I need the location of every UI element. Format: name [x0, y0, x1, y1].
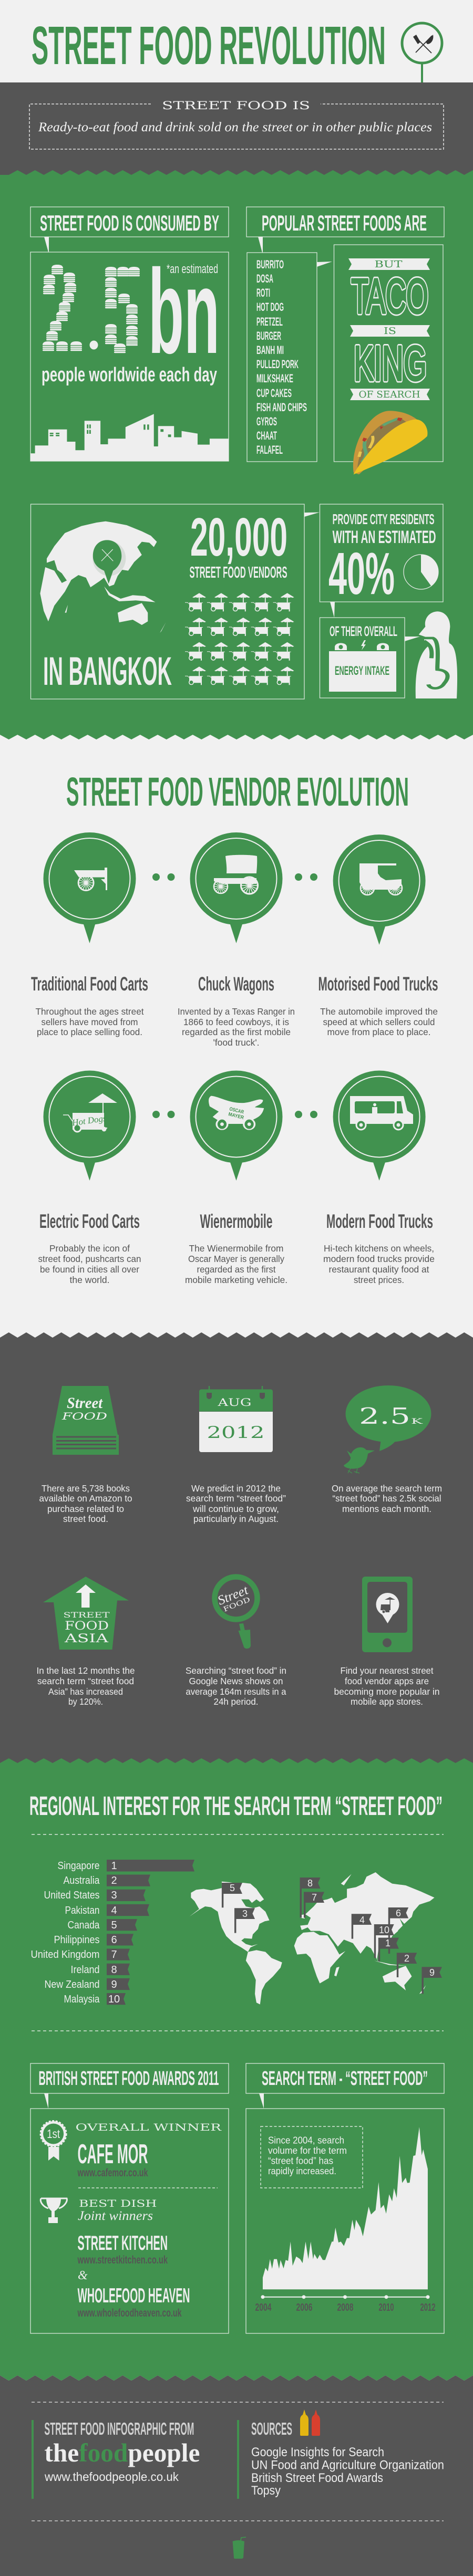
icon: book: FOOD — [61, 1411, 107, 1422]
icon: battery: ENERGY INTAKE — [335, 664, 389, 678]
vendor description: be found in cities all over — [40, 1264, 139, 1275]
vendor description: Invented by a Texas Ranger in — [178, 1006, 295, 1017]
timeline axis: 2008 — [337, 2302, 353, 2313]
credit block: thefoodpeople — [44, 2438, 200, 2467]
sources list: Topsy — [251, 2484, 281, 2498]
taco is king box: KING — [354, 336, 427, 391]
trend note: volume for the term — [268, 2145, 347, 2156]
sources list: British Street Food Awards — [251, 2471, 383, 2485]
burger numeral 2.5 — [43, 265, 140, 353]
stat text: Searching “street food” in — [186, 1665, 286, 1676]
icon: globe with pin — [40, 522, 166, 633]
vendor description: street food, pushcarts can — [38, 1254, 141, 1264]
bar chart: regional ranking: Philippines — [54, 1934, 100, 1946]
vendor: traditional food carts — [31, 832, 148, 1037]
pin: wienermobile: OSCAR — [229, 1106, 244, 1115]
definition dashed frame — [29, 104, 444, 149]
vendor description — [36, 1006, 144, 1037]
vendor description: place to place selling food. — [37, 1027, 142, 1037]
vendor description: sellers have moved from — [41, 1017, 138, 1027]
bar chart: regional ranking: Australia — [63, 1875, 100, 1886]
panel: popular foods — [246, 207, 444, 474]
consumed heading box — [30, 207, 229, 252]
vendor description — [178, 1006, 295, 1048]
icon: magnifier — [214, 1577, 258, 1649]
food list: FISH AND CHIPS — [256, 401, 307, 414]
bar chart: regional ranking — [30, 1834, 444, 2031]
connector dots — [152, 1111, 174, 1118]
stat text: search term “street food — [37, 1676, 134, 1686]
vendor description: 1866 to feed cowboys, it is — [183, 1017, 289, 1027]
panel: definition band — [0, 82, 473, 175]
trend note: rapidly increased. — [268, 2166, 336, 2176]
ampersand: & — [78, 2269, 88, 2282]
vendor description: The Wienermobile from — [189, 1243, 284, 1254]
sources list: Google Insights for Search — [251, 2445, 384, 2459]
food list: PULLED PORK — [256, 358, 299, 371]
credit block: www.thefoodpeople.co.uk — [44, 2470, 179, 2484]
bar chart: regional ranking: New Zealand — [44, 1979, 100, 1990]
overall winner label: OVERALL WINNER — [76, 2122, 222, 2133]
trend heading box — [246, 2063, 444, 2109]
connector dots — [295, 1111, 317, 1118]
bar chart: regional ranking: 4 — [111, 1905, 117, 1916]
taco is king box: BUT — [374, 259, 403, 270]
vendor description: the world. — [69, 1275, 109, 1285]
icon: sauce bottles — [300, 2410, 320, 2436]
stat text: “street food” has 2.5k social — [332, 1493, 441, 1504]
stat caption: people worldwide each day — [42, 364, 217, 386]
taco is king box: KING — [354, 336, 427, 391]
panel: energy intake: OF THEIR OVERALL — [330, 623, 397, 639]
icon: arrow house: ASIA — [64, 1632, 109, 1645]
pin: hot dog cart — [43, 1070, 136, 1181]
joint winner two url: www.wholefoodheaven.co.uk — [77, 2307, 182, 2319]
stat text: On average the search term — [332, 1483, 442, 1494]
icon: rosette: 1st — [47, 2127, 60, 2141]
pin: traditional cart — [43, 832, 136, 943]
bar chart: regional ranking: 6 — [111, 1934, 117, 1946]
flag numbers: 8 — [307, 1878, 313, 1889]
flag numbers — [230, 1878, 435, 1978]
icon: calendar: 2012 — [207, 1423, 265, 1442]
stat text: Asia” has increased — [48, 1686, 123, 1697]
bar chart: regional ranking: United States — [44, 1890, 100, 1901]
food list: PRETZEL — [256, 315, 283, 328]
bar chart: regional ranking: Singapore — [58, 1860, 100, 1872]
awards heading box — [30, 2063, 229, 2109]
food list: HOT DOG — [256, 300, 284, 314]
taco is king box — [334, 245, 443, 462]
bar chart: regional ranking: 5 — [111, 1920, 117, 1931]
food list: FALAFEL — [256, 443, 283, 456]
bar chart: regional ranking: Malaysia — [64, 1994, 100, 2005]
awards heading box: BRITISH STREET FOOD AWARDS 2011 — [39, 2068, 219, 2090]
timeline axis: 2012 — [420, 2302, 435, 2313]
map continents — [189, 1872, 435, 2005]
panel: consumed by: bn — [148, 245, 220, 379]
stat text: We predict in 2012 the — [191, 1483, 281, 1494]
panel: city residents — [320, 504, 443, 618]
credit block: STREET FOOD INFOGRAPHIC FROM — [44, 2419, 194, 2438]
bar chart: regional ranking: 9 — [111, 1979, 117, 1990]
icon: magnifier: Street — [215, 1583, 251, 1608]
timeline axis — [255, 2295, 435, 2313]
bar chart: regional ranking: Pakistan — [65, 1905, 100, 1916]
panel: green section two — [0, 1758, 473, 2381]
food list: GYROS — [256, 415, 277, 428]
flag numbers: 1 — [385, 1938, 390, 1948]
stat text: There are 5,738 books — [42, 1483, 130, 1494]
flag numbers: 5 — [230, 1883, 235, 1893]
icon: book — [53, 1386, 119, 1455]
icon: book: Street — [67, 1394, 104, 1412]
stat text: will continue to grow, — [192, 1504, 279, 1514]
vendor: modern food trucks — [295, 1070, 435, 1285]
icon: phone — [362, 1577, 413, 1652]
bar chart: regional ranking: Ireland — [70, 1964, 100, 1976]
panel: energy intake — [320, 611, 457, 698]
joint winner one: STREET KITCHEN — [78, 2232, 168, 2255]
panel: green section one — [0, 170, 473, 739]
city skyline — [30, 414, 229, 461]
callout tail to residents — [304, 513, 320, 517]
bar chart: regional ranking: 7 — [111, 1949, 117, 1960]
stat: google news — [186, 1577, 286, 1707]
stat text — [332, 1483, 442, 1514]
food list: BURGER — [256, 329, 281, 342]
vendor description: regarded as the first — [197, 1264, 276, 1275]
stat text: street food. — [63, 1514, 108, 1524]
callout tail to energy — [330, 602, 335, 618]
divider — [78, 2187, 218, 2188]
vendor description: Throughout the ages street — [36, 1006, 144, 1017]
connector dots — [152, 873, 174, 881]
vendor description — [320, 1006, 438, 1037]
food list: BURRITO — [256, 258, 284, 271]
definition text: Ready-to-eat food and drink sold on the street or in other public places — [38, 120, 432, 134]
stat text — [186, 1665, 286, 1707]
food list: BANH MI — [256, 343, 284, 357]
sources block — [237, 2410, 444, 2499]
bar chart: regional ranking: United Kingdom — [30, 1949, 100, 1960]
food list: DOSA — [256, 272, 273, 285]
credit block — [32, 2419, 200, 2499]
stat: social mentions — [332, 1385, 442, 1514]
bar chart: regional ranking: 3 — [111, 1890, 117, 1901]
pin: wienermobile — [190, 1070, 283, 1181]
icon: calendar: AUG — [217, 1396, 251, 1409]
vendor title: Traditional Food Carts — [31, 973, 148, 995]
pie chart — [404, 555, 438, 589]
stat text: 24h period. — [213, 1696, 259, 1707]
vendor description — [185, 1243, 287, 1285]
vendor description: move from place to place. — [327, 1027, 431, 1037]
icon: arrow house: STREET — [63, 1611, 110, 1620]
stat text: purchase related to — [47, 1504, 124, 1514]
vendor description: Probably the icon of — [49, 1243, 130, 1254]
icon: calendar — [199, 1386, 273, 1452]
icon: bird with speech bubble: K — [411, 1417, 423, 1426]
taco is king box: OF SEARCH — [358, 389, 420, 400]
flag numbers: 4 — [359, 1915, 365, 1925]
bar chart: regional ranking: 1 — [111, 1860, 117, 1872]
timeline axis: 2006 — [296, 2302, 312, 2313]
sources block: SOURCES — [251, 2419, 292, 2438]
panel: consumed by — [30, 207, 229, 461]
panel: search trend — [246, 2063, 444, 2333]
flag numbers: 9 — [429, 1967, 435, 1978]
icon: taco — [353, 411, 427, 474]
panel: footer — [0, 2375, 473, 2576]
consumed heading box: STREET FOOD IS CONSUMED BY — [40, 211, 219, 235]
vendor: motorised food trucks — [295, 835, 438, 1037]
bar chart: regional ranking: 2 — [111, 1875, 117, 1886]
sources list — [251, 2445, 444, 2498]
stat text: average 164m results in a — [186, 1686, 286, 1697]
flag numbers: 6 — [396, 1908, 401, 1918]
icon: fork and knife sign — [402, 23, 442, 83]
stat text — [334, 1665, 439, 1707]
vendor description: 'food truck'. — [213, 1037, 260, 1048]
panel: statistics band — [0, 1332, 473, 1765]
pin: hot dog cart: Hot Dogs — [71, 1113, 107, 1128]
stat text — [186, 1483, 286, 1524]
vendor: wienermobile — [152, 1070, 287, 1285]
stat: asia growth — [37, 1577, 135, 1707]
vendor title: Wienermobile — [200, 1211, 272, 1232]
vendor description: The automobile improved the — [320, 1006, 438, 1017]
stat text: becoming more popular in — [334, 1686, 439, 1697]
vendor: electric food carts — [38, 1070, 141, 1285]
sources list: UN Food and Agriculture Organization — [251, 2458, 444, 2473]
flag numbers: 7 — [312, 1892, 317, 1903]
callout tail to person — [405, 637, 420, 641]
pin: wagon — [190, 832, 283, 943]
vendor description: Oscar Mayer is generally — [188, 1254, 284, 1264]
vendor title: Chuck Wagons — [198, 973, 274, 995]
food list: MILKSHAKE — [256, 372, 293, 385]
food list — [247, 253, 317, 462]
icon: trophy — [40, 2198, 67, 2223]
consumed stat box — [30, 252, 229, 461]
icon: arrow house: FOOD — [65, 1620, 109, 1633]
vendor: chuck wagons — [152, 832, 295, 1048]
stat: mobile apps — [334, 1577, 439, 1707]
best dish label: BEST DISH — [79, 2198, 157, 2209]
panel: awards — [30, 2063, 229, 2333]
bar chart: regional ranking: 10 — [108, 1994, 120, 2005]
pin: wienermobile: MAYER — [228, 1111, 244, 1121]
stat text: search term “street food” — [186, 1493, 286, 1504]
flag numbers: 2 — [404, 1953, 409, 1964]
list callout tail — [317, 262, 332, 267]
connector dots — [295, 873, 317, 881]
stat text — [39, 1483, 132, 1524]
icon: person with digestive tract — [416, 611, 457, 698]
vendors count: 20,000 — [190, 507, 287, 567]
food list: ROTI — [256, 286, 270, 299]
vendor description: regarded as the first mobile — [182, 1027, 291, 1037]
icon: rosette — [41, 2121, 66, 2161]
vendor description: mobile marketing vehicle. — [185, 1275, 287, 1285]
vendor description: street prices. — [354, 1275, 404, 1285]
icon: magnifier: FOOD — [222, 1596, 252, 1614]
stat text: food vendor apps are — [345, 1676, 429, 1686]
joint winner one url: www.streetkitchen.co.uk — [77, 2254, 168, 2266]
vendor description — [38, 1243, 141, 1285]
world map with flags — [189, 1872, 442, 2005]
icon: battery — [329, 640, 396, 692]
map flags — [222, 1878, 442, 1994]
vendor description: speed at which sellers could — [323, 1017, 435, 1027]
panel: awards: CAFE MOR — [78, 2139, 148, 2170]
flag numbers: 3 — [242, 1908, 248, 1919]
stat text: available on Amazon to — [39, 1493, 132, 1504]
icon: drink cup — [233, 2537, 246, 2559]
stat text: mentions each month. — [342, 1504, 431, 1514]
timeline axis: 2004 — [255, 2302, 272, 2313]
timeline axis: 2010 — [378, 2302, 394, 2313]
stat: books — [39, 1386, 132, 1524]
taco is king box: IS — [384, 326, 396, 337]
stat text: mobile app stores. — [351, 1696, 423, 1707]
trend note — [261, 2126, 363, 2188]
definition heading: STREET FOOD IS — [162, 99, 310, 112]
icon grid: carts — [185, 593, 294, 685]
icon: arrow house — [43, 1577, 129, 1650]
pin: motor truck — [333, 835, 426, 945]
vendor description: modern food trucks provide — [323, 1254, 435, 1264]
trend note: “street food” has — [268, 2156, 333, 2166]
estimated note: *an estimated — [167, 262, 218, 276]
stat text: Google News shows on — [189, 1676, 283, 1686]
icon: bird with speech bubble: 2.5 — [359, 1403, 410, 1429]
pin: modern truck — [333, 1070, 426, 1181]
location label: IN BANGKOK — [43, 649, 172, 694]
stat text — [37, 1665, 135, 1707]
40 percent: 40% — [328, 540, 395, 607]
vendor description — [323, 1243, 435, 1285]
panel: bangkok vendors — [30, 504, 320, 699]
food list: CHAAT — [256, 429, 277, 442]
trend note: Since 2004, search — [268, 2135, 344, 2146]
food list: CUP CAKES — [256, 387, 292, 400]
flag numbers: 10 — [379, 1925, 389, 1935]
area chart — [263, 2127, 428, 2289]
bar chart: regional ranking: 8 — [111, 1964, 117, 1976]
vendor description: restaurant quality food at — [329, 1264, 429, 1275]
stat text: In the last 12 months the — [37, 1665, 135, 1676]
stat text: particularly in August. — [193, 1514, 279, 1524]
icon: bird with speech bubble — [344, 1385, 431, 1473]
vendor description: Hi-tech kitchens on wheels, — [324, 1243, 434, 1254]
overall winner url: www.cafemor.co.uk — [77, 2167, 148, 2179]
header — [32, 15, 442, 83]
stat: prediction — [186, 1386, 286, 1524]
panel: awards: WHOLEFOOD HEAVEN — [78, 2285, 190, 2307]
vendor title: Electric Food Carts — [39, 1211, 140, 1232]
stat text: Find your nearest street — [341, 1665, 434, 1676]
bar chart: regional ranking: Canada — [67, 1920, 100, 1931]
panel: bangkok vendors: STREET FOOD VENDORS — [189, 563, 287, 581]
popular heading box — [246, 207, 444, 253]
stat text: by 120%. — [68, 1696, 103, 1707]
joint winners note: Joint winners — [78, 2209, 153, 2223]
